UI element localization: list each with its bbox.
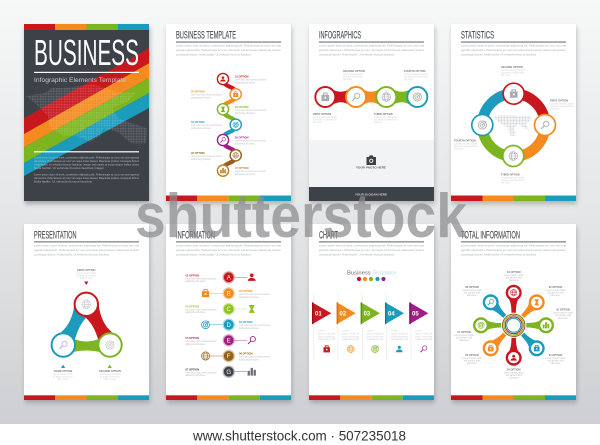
letter labels: adipiscing elit donec [186, 311, 206, 314]
flag text: adipiscing elit [367, 338, 384, 341]
chain labels: elit nunc [404, 78, 414, 81]
timeline labels: Lorem ipsum dolor sit amet consectetur [235, 140, 266, 143]
timeline labels: 06 OPTION [191, 151, 205, 155]
intro text: consequat dictum. Nulla facilisi. Ut vehicula rhoncus faucibus [319, 52, 395, 56]
cover body text: Nulla facilisi. Ut vehicula rhoncus faucibus [34, 179, 93, 183]
flag text: amet consectetur [367, 335, 384, 338]
intro text: consequat dictum. Nulla facilisi. Ut vehicula rhoncus faucibus [461, 252, 537, 256]
intro text [461, 44, 567, 56]
cover rule [34, 72, 139, 73]
ring labels: FOURTH OPTION [454, 138, 476, 142]
radial labels: 05 OPTION [507, 367, 521, 371]
heading: BUSINESS TEMPLATE [176, 30, 236, 42]
radial labels: Lorem ipsum dolor [462, 289, 482, 292]
radial labels: donec [509, 279, 520, 282]
timeline labels: adipiscing elit donec [235, 173, 256, 176]
trefoil connectors [61, 304, 112, 357]
ring labels: elit nunc [501, 182, 511, 185]
intro text [176, 244, 282, 256]
intro text: egestas elementum. Pellentesque ac nunc vel neque luctus laoreet. Maecenas pretium [461, 48, 567, 52]
letter labels: adipiscing elit donec [186, 343, 206, 346]
radial labels: sit amet elit [464, 360, 480, 363]
timeline labels: Lorem ipsum dolor sit amet consectetur [235, 109, 266, 112]
timeline labels: 02 OPTION [191, 90, 205, 94]
letter labels: Lorem ipsum dolor sit amet consectetur [186, 340, 217, 343]
trefoil labels: sit amet consectetur [76, 275, 96, 278]
cover body text: Nulla facilisi. Ut vehicula rhoncus faucibus integer [34, 166, 104, 170]
chain labels: THIRD OPTION [374, 112, 393, 116]
flags: 04 [388, 311, 395, 317]
radial labels: donec [467, 362, 478, 365]
chain labels: Lorem ipsum dolor [404, 73, 428, 76]
intro text [319, 44, 425, 56]
letter nodes: G [226, 370, 231, 376]
letter labels: 05 OPTION [186, 336, 199, 340]
flag text: Lorem [318, 330, 325, 333]
timeline nodes [217, 73, 241, 176]
cover body text: Nulla facilisi. Ut vehicula rhoncus faucibus. Integer sed mauris at lectus tempor finibus donec [34, 162, 139, 166]
ring labels: Lorem ipsum dolor [501, 176, 525, 179]
footer caption: www.shutterstock.com · 507235018 [192, 428, 406, 444]
flag text: Lorem [342, 330, 349, 333]
timeline labels: adipiscing elit donec [235, 142, 256, 145]
letter labels: adipiscing elit donec [239, 327, 260, 330]
radial labels: sit amet elit [555, 314, 571, 317]
trefoil labels: sit amet consectetur [100, 376, 120, 379]
letter labels: Lorem ipsum dolor sit amet consectetur [239, 293, 270, 296]
intro text [319, 244, 425, 256]
letter labels [186, 273, 270, 377]
cover world map [26, 84, 147, 144]
photo caption: YOUR PHOTO HERE [356, 166, 386, 170]
flag text: amet consectetur [391, 335, 408, 338]
flag text: amet consectetur [342, 335, 359, 338]
radial labels: 01 OPTION [507, 270, 521, 274]
flags [312, 302, 428, 324]
flag text: Lorem [367, 330, 374, 333]
trefoil labels: elit nunc [104, 378, 117, 381]
letter labels: Lorem ipsum dolor sit amet consectetur [186, 277, 217, 280]
intro text: Lorem ipsum dolor sit amet, consectetur adipiscing elit. Pellentesque ac nunc nec erat [319, 244, 424, 248]
panel: information [166, 224, 292, 403]
bottom colour bar [451, 395, 576, 400]
intro text: egestas elementum. Pellentesque ac nunc vel neque luctus laoreet. Maecenas pretium [176, 248, 282, 252]
radial labels: 07 OPTION [457, 330, 471, 334]
intro text [461, 244, 567, 256]
timeline labels: 07 OPTION [235, 166, 249, 170]
flag text: adipiscing elit [415, 338, 433, 341]
trefoil labels: Lorem ipsum dolor [53, 373, 73, 376]
timeline labels [191, 75, 266, 176]
radial labels: Lorem ipsum dolor [462, 357, 482, 360]
radial labels: sit amet elit [456, 337, 472, 340]
heading: TOTAL INFORMATION [461, 229, 520, 241]
ring labels: SECOND OPTION [501, 65, 523, 69]
radial labels: 04 OPTION [549, 353, 562, 357]
letter nodes: B [227, 291, 231, 297]
ring labels: sit amet consectetur [454, 145, 478, 148]
bottom colour bar [309, 395, 434, 400]
flags: 01 [315, 311, 322, 317]
radial labels: Lorem ipsum dolor [553, 312, 573, 315]
trefoil labels: elit nunc [80, 277, 93, 280]
timeline labels: adipiscing elit donec [235, 112, 256, 115]
timeline icons [220, 76, 239, 173]
radial labels: sit amet elit [548, 360, 564, 363]
letter labels: 02 OPTION [239, 289, 253, 293]
panel: total information [451, 224, 577, 403]
trefoil labels: elit nunc [57, 378, 70, 381]
letter labels: adipiscing elit donec [186, 280, 206, 283]
slogan text: YOUR SLOGAN HERE [355, 193, 387, 197]
timeline labels: adipiscing elit donec [235, 81, 256, 84]
timeline labels: adipiscing elit donec [191, 158, 212, 161]
flag text [318, 330, 433, 341]
chain labels [313, 69, 428, 124]
radial labels: donec [459, 339, 470, 342]
flag poles [313, 293, 411, 360]
flag text: ipsum dolor sit [367, 333, 384, 336]
letter labels: Lorem ipsum dolor sit amet consectetur [186, 308, 217, 311]
ring centre map [494, 115, 531, 137]
letter labels: adipiscing elit donec [239, 296, 260, 299]
cover body text: Lorem ipsum dolor sit amet, consectetur adipiscing elit. Pellentesque ac nunc nec erat egestas [34, 172, 139, 176]
chain labels: FOURTH OPTION [404, 69, 426, 73]
radial labels [454, 270, 573, 380]
chain connectors [330, 88, 412, 106]
chain labels: sit amet consectetur [313, 119, 337, 122]
radial labels: 08 OPTION [465, 285, 479, 289]
intro text: consequat dictum. Nulla facilisi. Ut vehicula rhoncus faucibus [34, 252, 110, 256]
cover top colour bar [24, 24, 149, 30]
chain circles [315, 87, 427, 107]
bottom colour bar [451, 196, 576, 201]
chain labels: Lorem ipsum dolor [313, 116, 337, 119]
timeline labels: 04 OPTION [191, 120, 205, 124]
radial hub [501, 313, 526, 338]
flag text: adipiscing elit [318, 338, 335, 341]
ring labels: sit amet consectetur [501, 72, 525, 75]
chain labels: FIRST OPTION [313, 112, 331, 116]
intro text: Lorem ipsum dolor sit amet, consectetur adipiscing elit. Pellentesque ac nunc nec erat [461, 244, 566, 248]
ring labels: elit nunc [454, 148, 464, 151]
flag text: ipsum dolor sit [391, 333, 408, 336]
radial labels: Lorem ipsum dolor [454, 334, 474, 337]
timeline labels: 03 OPTION [235, 105, 249, 109]
chain labels: SECOND OPTION [343, 69, 365, 73]
letter nodes [222, 271, 235, 378]
timeline labels: Lorem ipsum dolor sit amet consectetur [235, 170, 266, 173]
intro text: Lorem ipsum dolor sit amet, consectetur adipiscing elit. Pellentesque ac nunc nec erat [319, 44, 424, 48]
cover subtitle: Infographic Elements Template [34, 78, 127, 84]
chart dots [357, 277, 386, 281]
flag text: Lorem [391, 330, 398, 333]
chain labels: Lorem ipsum dolor [343, 73, 363, 76]
trefoil nodes [52, 293, 122, 357]
intro text [176, 44, 282, 56]
trefoil markers [61, 282, 112, 368]
slogan bar [309, 187, 434, 201]
watermark: shutterstock [135, 182, 467, 251]
ring labels: THIRD OPTION [501, 172, 520, 176]
ring labels: sit amet consectetur [550, 105, 574, 108]
radial labels: sit amet elit [464, 292, 480, 295]
ring nodes [472, 83, 556, 166]
radial icons [478, 289, 549, 361]
letter labels: Lorem ipsum dolor sit amet consectetur [239, 324, 270, 327]
ring labels: sit amet consectetur [501, 179, 525, 182]
letter labels: 07 OPTION [186, 367, 199, 371]
letter labels: adipiscing elit donec [239, 358, 260, 361]
ring labels: elit nunc [550, 108, 560, 111]
radial labels: Lorem ipsum dolor [546, 357, 566, 360]
heading: PRESENTATION [34, 229, 77, 241]
letter labels: Lorem ipsum dolor sit amet consectetur [186, 371, 217, 374]
letter labels: Lorem ipsum dolor sit amet consectetur [239, 356, 270, 359]
intro text: egestas elementum. Pellentesque ac nunc vel neque luctus laoreet. Maecenas pretium [319, 48, 425, 52]
bottom colour bar [166, 196, 291, 201]
ring chart [482, 94, 545, 156]
radial labels: Lorem ipsum dolor [504, 371, 524, 374]
radial labels: 06 OPTION [465, 353, 479, 357]
radial labels: donec [467, 294, 478, 297]
letter icons [201, 273, 256, 376]
cover body text: Lorem ipsum dolor sit amet, consectetur adipiscing elit. Pellentesque ac nunc nec erat egestas [34, 156, 139, 160]
letter nodes: E [227, 338, 231, 344]
cover body text: elementum. Pellentesque ac nunc vel neque luctus laoreet. Maecenas pretium consequat dictum [34, 159, 139, 163]
cover body text: elementum. Pellentesque ac nunc vel neque luctus laoreet. Maecenas pretium consequat dictum [34, 176, 139, 180]
radial labels: donec [509, 377, 520, 380]
heading: CHART [319, 229, 338, 241]
intro text: consequat dictum. Nulla facilisi. Ut vehicula rhoncus faucibus [176, 52, 252, 56]
flags: 05 [412, 311, 419, 317]
heading: INFORMATION [176, 229, 215, 241]
panel: infographics [309, 24, 435, 204]
letter labels: 04 OPTION [239, 320, 253, 324]
panel: presentation [24, 224, 150, 403]
intro text: egestas elementum. Pellentesque ac nunc vel neque luctus laoreet. Maecenas pretium [34, 248, 140, 252]
letter connectors [210, 277, 247, 372]
radial labels: donec [550, 362, 562, 365]
trefoil labels: Lorem ipsum dolor [76, 272, 96, 275]
timeline labels: Lorem ipsum dolor sit amet consectetur [191, 155, 222, 158]
intro text: Lorem ipsum dolor sit amet, consectetur adipiscing elit. Pellentesque ac nunc nec erat [176, 44, 281, 48]
radial arms [484, 295, 544, 355]
chain labels: Lorem ipsum dolor [374, 116, 398, 119]
cover colour stripes [24, 48, 149, 176]
flags: 03 [364, 311, 371, 317]
timeline labels: adipiscing elit donec [191, 127, 212, 130]
ring labels: elit nunc [501, 74, 511, 77]
ring labels: Lorem ipsum dolor [454, 142, 478, 145]
flag text: amet consectetur [318, 335, 335, 338]
cover body text [34, 156, 139, 183]
panel: statistics [451, 24, 577, 204]
radial nodes [474, 286, 553, 365]
ring labels [454, 65, 574, 185]
intro text: consequat dictum. Nulla facilisi. Ut vehicula rhoncus faucibus [461, 52, 537, 56]
panel: chart [309, 224, 435, 403]
letter nodes: D [227, 323, 232, 329]
intro text: consequat dictum. Nulla facilisi. Ut vehicula rhoncus faucibus [176, 252, 252, 256]
chain labels: sit amet consectetur [404, 76, 428, 79]
intro text: egestas elementum. Pellentesque ac nunc vel neque luctus laoreet. Maecenas pretium [461, 248, 567, 252]
intro text [34, 244, 140, 256]
intro text: consequat dictum. Nulla facilisi. Ut vehicula rhoncus faucibus [319, 252, 395, 256]
trefoil labels: sit amet consectetur [53, 376, 73, 379]
heading: INFOGRAPHICS [319, 30, 361, 42]
radial labels: Lorem ipsum dolor [546, 289, 566, 292]
ring icons [478, 90, 549, 160]
radial labels: sit amet elit [506, 277, 522, 280]
chain labels: elit nunc [374, 121, 384, 124]
radial labels: sit amet elit [506, 374, 522, 377]
letter nodes: C [227, 307, 232, 313]
heading: STATISTICS [461, 30, 494, 42]
chart title: Business Template [347, 271, 396, 277]
chain labels: sit amet consectetur [343, 76, 363, 79]
radial labels: donec [550, 294, 562, 297]
cover title: BUSINESS [34, 32, 139, 73]
radial labels: 02 OPTION [549, 285, 562, 289]
chain labels: sit amet consectetur [374, 119, 398, 122]
intro text: egestas elementum. Pellentesque ac nunc vel neque luctus laoreet. Maecenas pretium [319, 248, 425, 252]
intro text: egestas elementum. Pellentesque ac nunc vel neque luctus laoreet. Maecenas pretium [176, 48, 282, 52]
photo placeholder [309, 140, 434, 187]
ring labels: Lorem ipsum dolor [501, 69, 525, 72]
chain labels: elit nunc [313, 121, 323, 124]
panel: business cover [24, 24, 150, 204]
letter labels: 03 OPTION [186, 304, 199, 308]
chain icons [321, 93, 421, 101]
letter labels: 06 OPTION [239, 352, 253, 356]
radial labels: 03 OPTION [556, 308, 570, 312]
letter labels: 01 OPTION [186, 273, 199, 277]
flag text: ipsum dolor sit [342, 333, 360, 336]
panel: business template [166, 24, 292, 204]
trefoil icons [59, 300, 114, 349]
timeline labels: adipiscing elit donec [191, 96, 212, 99]
letter labels: adipiscing elit donec [186, 374, 206, 377]
intro text: Lorem ipsum dolor sit amet, consectetur adipiscing elit. Pellentesque ac nunc nec erat [461, 44, 566, 48]
flag text: ipsum dolor sit [318, 333, 335, 336]
trefoil labels: FIRST OPTION [77, 268, 96, 272]
flag text: ipsum dolor sit [415, 333, 433, 336]
intro text: Lorem ipsum dolor sit amet, consectetur adipiscing elit. Pellentesque ac nunc nec erat [176, 244, 281, 248]
intro text: Lorem ipsum dolor sit amet, consectetur adipiscing elit. Pellentesque ac nunc nec erat [34, 244, 139, 248]
cover lower rule [34, 151, 139, 152]
letter nodes: A [227, 275, 231, 281]
trefoil labels [53, 268, 121, 381]
timeline labels: Lorem ipsum dolor sit amet consectetur [191, 94, 222, 97]
timeline connectors [223, 79, 236, 171]
flags: 02 [340, 311, 347, 317]
radial labels: donec [558, 317, 569, 320]
bottom colour bar [24, 395, 149, 400]
flag text: adipiscing elit [342, 338, 360, 341]
flag text: adipiscing elit [391, 338, 408, 341]
ring labels: Lorem ipsum dolor [550, 102, 574, 105]
timeline labels: 05 OPTION [235, 136, 249, 140]
trefoil labels: Lorem ipsum dolor [100, 373, 120, 376]
timeline labels: 01 OPTION [235, 75, 249, 79]
bottom colour bar [166, 395, 291, 400]
radial labels: Lorem ipsum dolor [504, 274, 524, 277]
flag text: amet consectetur [415, 335, 432, 338]
trefoil labels: THIRD OPTION [54, 369, 72, 373]
ring labels: FIRST OPTION [550, 98, 568, 102]
letter nodes: F [227, 354, 231, 360]
flag text: Lorem [415, 330, 422, 333]
chain labels: elit nunc [343, 78, 353, 81]
timeline labels: Lorem ipsum dolor sit amet consectetur [235, 79, 266, 82]
trefoil labels: SECOND OPTION [99, 369, 121, 373]
timeline labels: Lorem ipsum dolor sit amet consectetur [191, 124, 222, 127]
icon: camera [366, 155, 376, 165]
flag icons [324, 345, 427, 353]
radial labels: sit amet elit [548, 292, 564, 295]
